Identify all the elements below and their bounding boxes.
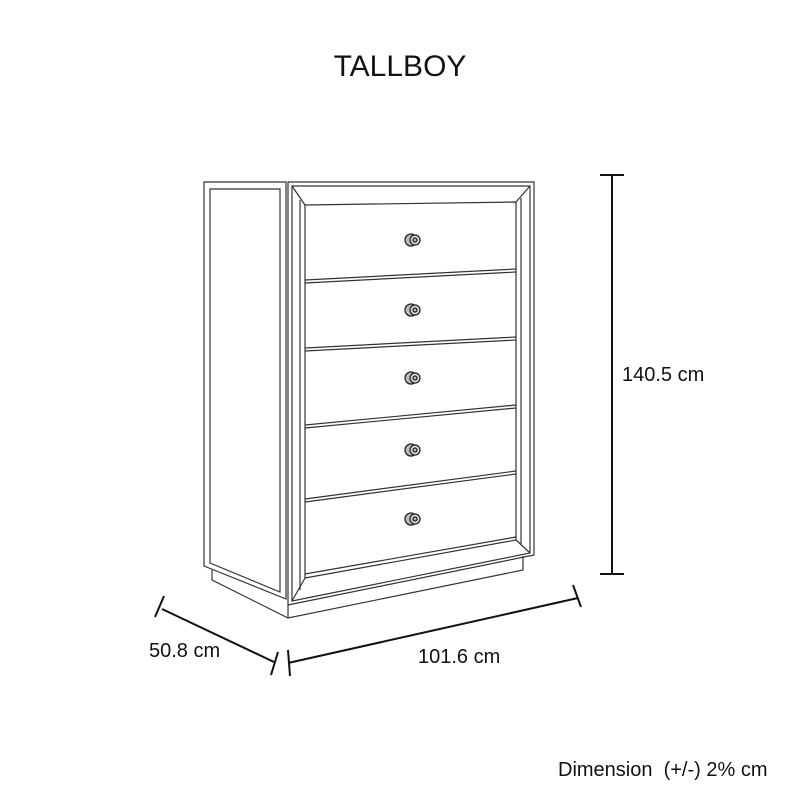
label: height: 140.5 cm [622,364,704,386]
side panel [204,182,286,599]
dimension: depth [155,596,278,675]
label: depth: 50.8 cm [149,640,220,662]
dimension: width [288,585,581,676]
title: TALLBOY [334,50,466,83]
plinth [212,556,523,618]
label: width: 101.6 cm [418,646,500,668]
knobs [405,234,420,525]
dimension: height [600,175,624,574]
drawer dividers [305,269,516,574]
front frame [288,182,534,605]
footnote: Dimension (+/-) 2% cm [558,759,768,781]
